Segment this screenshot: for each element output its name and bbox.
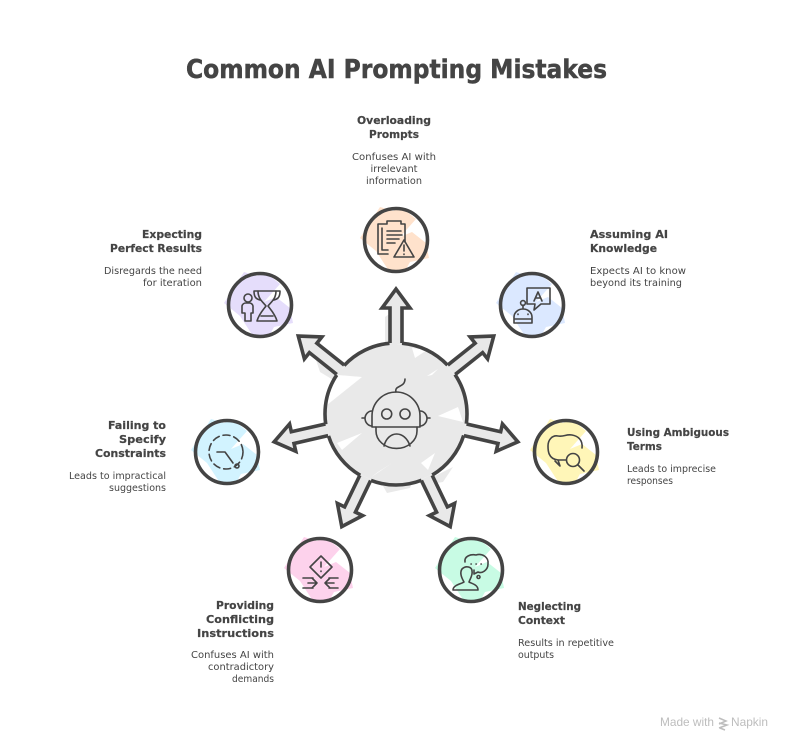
text: using ambiguous terms xyxy=(627,426,729,487)
text: assuming AI knowledge: Expects AI to know xyxy=(590,266,686,277)
footer: made with napkin: Napkin xyxy=(731,715,768,729)
text: overloading prompts: Confuses AI with xyxy=(352,152,436,163)
arrow upper left xyxy=(288,324,350,381)
text: providing conflicting instructions: demands xyxy=(232,674,274,685)
text: providing conflicting instructions: contradictory xyxy=(208,662,274,673)
node: using ambiguous terms xyxy=(530,419,599,484)
text: overloading prompts: irrelevant xyxy=(370,164,418,175)
text: using ambiguous terms: Using Ambiguous xyxy=(627,426,729,439)
icon: person beside trophy hourglass xyxy=(224,272,293,336)
text: neglecting context: Results in repetitive xyxy=(518,638,614,649)
icon: robot with speech bubble xyxy=(496,272,565,336)
text: assuming AI knowledge xyxy=(590,228,686,289)
icon: sad robot xyxy=(362,379,430,448)
icon: clipboard warning xyxy=(360,207,429,272)
text: providing conflicting instructions xyxy=(191,599,274,685)
text: expecting perfect results: Expecting xyxy=(142,228,202,241)
text: overloading prompts xyxy=(352,114,436,187)
text: assuming AI knowledge: Assuming AI xyxy=(590,228,668,241)
footer: made with napkin: Made with xyxy=(660,715,714,729)
hub sketch fill xyxy=(316,312,466,493)
text: assuming AI knowledge: beyond its training xyxy=(590,278,682,289)
arrow right xyxy=(461,416,523,456)
text: expecting perfect results xyxy=(104,228,202,289)
text: failing to specify constraints xyxy=(69,419,166,494)
node: expecting perfect results xyxy=(224,272,293,336)
arrow up xyxy=(382,287,410,344)
node: neglecting context xyxy=(435,537,504,602)
footer: made with napkin xyxy=(660,715,768,730)
arrow lower right xyxy=(414,471,464,535)
text: providing conflicting instructions: Providing xyxy=(216,599,274,612)
node: assuming AI knowledge xyxy=(496,272,565,336)
text: overloading prompts: Prompts xyxy=(369,128,419,141)
text: providing conflicting instructions: Confuses AI with xyxy=(191,650,274,661)
node: failing to specify constraints xyxy=(191,419,260,484)
node: overloading prompts xyxy=(360,207,429,272)
text: expecting perfect results: Disregards the need xyxy=(104,266,202,277)
icon: dashed clock xyxy=(191,419,260,484)
text: neglecting context: outputs xyxy=(518,650,554,661)
text: providing conflicting instructions: Conflicting xyxy=(206,613,274,626)
text: assuming AI knowledge: Knowledge xyxy=(590,242,657,255)
text: using ambiguous terms: Leads to imprecise xyxy=(627,464,716,475)
text: failing to specify constraints: suggestions xyxy=(109,483,166,494)
text: neglecting context: Neglecting xyxy=(518,600,581,613)
arrow lower left xyxy=(328,471,378,535)
central hub with seven arrows xyxy=(269,287,523,535)
text: using ambiguous terms: responses xyxy=(627,476,673,487)
hub outline xyxy=(325,343,467,485)
icon: warning diamond with opposing arrows xyxy=(284,537,353,602)
text: failing to specify constraints: Specify xyxy=(119,433,166,446)
icon: person with thought bubble xyxy=(435,537,504,602)
text: failing to specify constraints: Failing to xyxy=(108,419,166,432)
icon: napkin logo xyxy=(719,718,727,730)
title: Common AI Prompting Mistakes xyxy=(186,55,607,85)
arrow left xyxy=(269,416,331,456)
text: overloading prompts: Overloading xyxy=(357,114,431,127)
text: overloading prompts: information xyxy=(366,176,422,187)
text: using ambiguous terms: Terms xyxy=(627,440,662,453)
icon: speech bubble with magnifier xyxy=(530,419,599,484)
text: expecting perfect results: for iteration xyxy=(143,278,202,289)
arrow upper right xyxy=(442,324,504,381)
text: expecting perfect results: Perfect Results xyxy=(110,242,202,255)
text: neglecting context: Context xyxy=(518,614,565,627)
node: providing conflicting instructions xyxy=(284,537,353,602)
text: failing to specify constraints: Constraints xyxy=(95,447,166,460)
text: failing to specify constraints: Leads to impractical xyxy=(69,471,166,482)
text: providing conflicting instructions: Instructions xyxy=(197,627,274,640)
hub white sketch gaps xyxy=(325,348,463,478)
text: neglecting context xyxy=(518,600,614,661)
